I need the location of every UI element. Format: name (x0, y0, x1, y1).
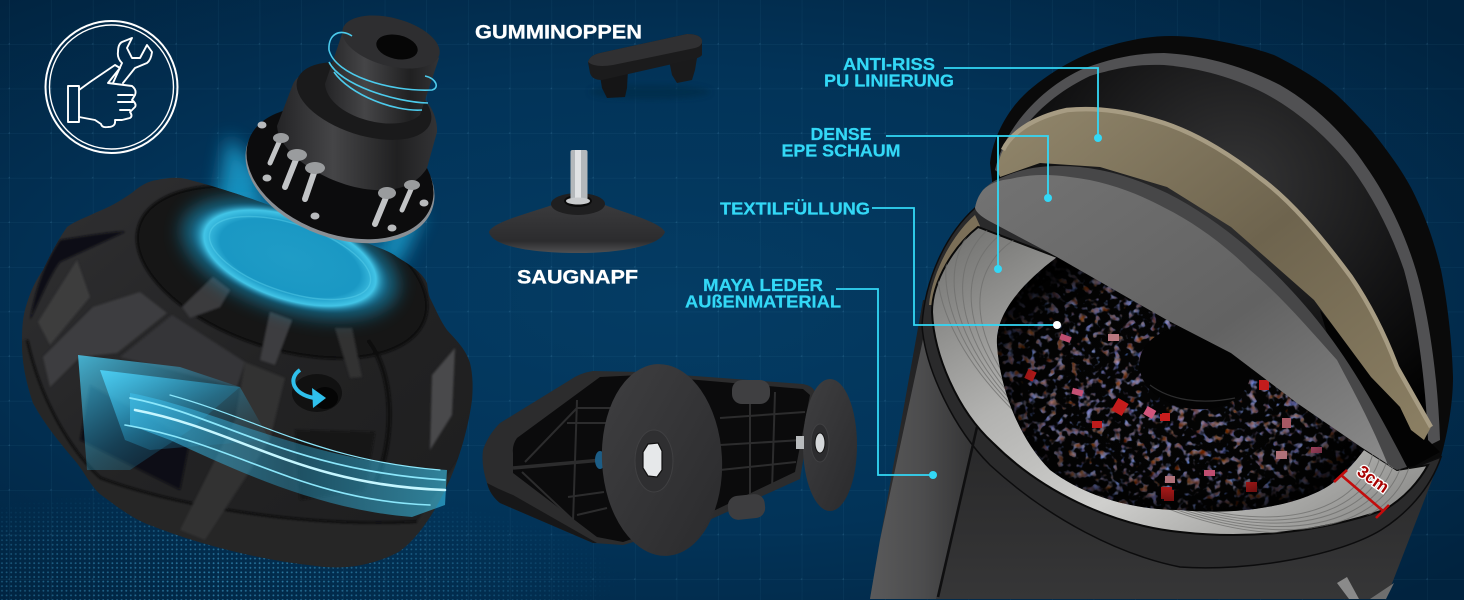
dimension mark: 3cm: 3cm (1354, 462, 1392, 497)
callout: Anti-Riss PU Linierung (824, 54, 1102, 142)
blue plate glow (167, 174, 413, 342)
callout: Textilfüllung (720, 198, 1061, 329)
callout: Dense EPE Schaum: EPE SCHAUM (782, 140, 900, 160)
textile filling (996, 258, 1364, 512)
label: Gumminoppen: GUMMINOPPEN (475, 22, 642, 44)
label: Saugnapf: SAUGNAPF (517, 266, 638, 288)
callout: Maya Leder Außenmaterial (685, 275, 937, 479)
product: threaded mount with bolts (227, 6, 453, 268)
icon: hand holding wrench (46, 21, 178, 153)
callout: Dense EPE Schaum (782, 124, 1052, 273)
speed sweep (78, 355, 240, 470)
sliver of tan lining at rim (929, 215, 980, 305)
product: rubber pad (588, 34, 710, 99)
zipper pull (938, 427, 977, 597)
bag body (870, 300, 1453, 599)
dimension mark: 3cm (1334, 462, 1392, 518)
callout: Maya Leder Außenmaterial: AUßENMATERIAL (685, 292, 841, 312)
bag lid (990, 36, 1453, 470)
icon: rotate arrow on valve (292, 370, 342, 412)
product: inflatable ball with glow (22, 131, 473, 568)
product: bean bag cutaway (870, 36, 1464, 600)
product: suction cup with screw (489, 150, 665, 253)
dark rim band (922, 208, 1441, 568)
product: base plate with suction cups (482, 361, 857, 559)
EPE foam flap (975, 166, 1407, 470)
callout: Anti-Riss PU Linierung: PU LINIERUNG (824, 70, 954, 90)
tan PU lining flap (997, 109, 1431, 440)
blue rotation rings (329, 32, 436, 110)
callout: Maya Leder Außenmaterial: MAYA LEDER (703, 275, 823, 295)
bolts (258, 122, 428, 232)
stitched padding ring (931, 226, 1430, 536)
callout: Anti-Riss PU Linierung: ANTI-RISS (843, 54, 935, 74)
callout: Textilfüllung: TEXTILFÜLLUNG (720, 198, 870, 218)
callout: Dense EPE Schaum: DENSE (810, 124, 872, 144)
beam glow behind flange (215, 135, 425, 265)
